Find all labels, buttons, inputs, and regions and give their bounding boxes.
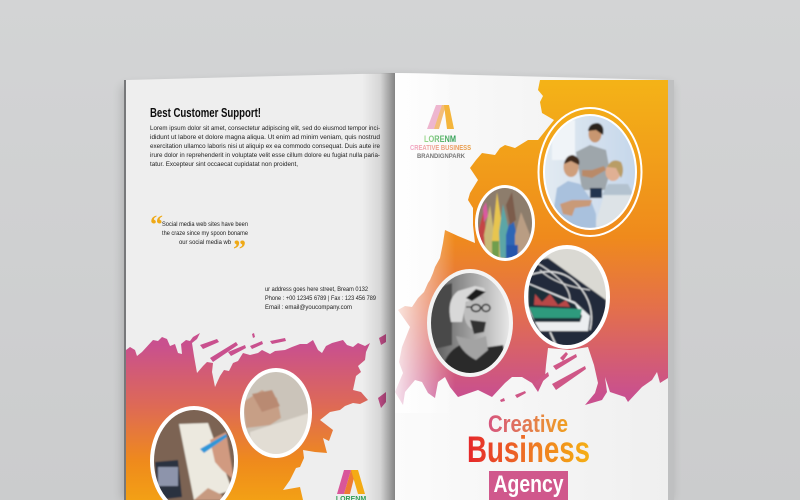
spine shadow	[362, 73, 395, 500]
pull quote	[150, 210, 248, 264]
body paragraph: exercitation ullamco laboris nisi ut aliquip ex ea commodo consequat. Duis aute ire	[150, 143, 380, 150]
body paragraph: tatur. Excepteur sint occaecat cupidatat non proident,	[150, 161, 298, 168]
left page colour splash	[126, 333, 370, 500]
body paragraph: ididunt ut labore et dolore magna aliqua. Ut enim ad minim veniam, quis nostrud	[150, 134, 380, 141]
splash flecks and streaks on left page	[200, 333, 386, 408]
body paragraph	[150, 125, 380, 168]
title: creative: Creative	[488, 411, 568, 438]
booklet drop shadow	[122, 76, 672, 500]
contact details: Email : email@youcompany.com	[265, 304, 352, 311]
left page logo	[336, 470, 366, 500]
title: business: Business	[467, 429, 590, 470]
pull quote: ”	[233, 235, 246, 264]
contact details: Phone : +00 12345 6789 | Fax : 123 456 789	[265, 295, 376, 302]
pink streaks in white brush area	[500, 352, 586, 402]
pull quote: Social media web sites have been	[162, 221, 248, 228]
contact details	[265, 286, 376, 311]
pull quote: the craze since my spoon boname	[162, 230, 248, 237]
body paragraph: irure dolor in reprehenderit in voluptate velit esse cillum dolore eu fugiat nulla paria-	[150, 152, 380, 159]
pull quote: our social media wb	[179, 239, 231, 246]
right page logo: CREATIVE BUSINESS	[410, 145, 471, 152]
photo: colored pencils	[475, 185, 535, 261]
brochure mockup scene	[116, 73, 678, 500]
photo: hands on keyboard	[240, 368, 312, 458]
right page logo: BRANDIGNPARK	[417, 153, 465, 160]
body paragraph: Lorem ipsum dolor sit amet, consectetur adipiscing elit, sed do eiusmod tempor inci-	[150, 125, 380, 132]
pull quote: “	[150, 210, 163, 239]
right page logo: LORENM	[424, 134, 456, 144]
right page colour splash	[395, 80, 668, 405]
right page logo	[410, 105, 471, 160]
contact details: ur address goes here street, Bream 0132	[265, 286, 368, 293]
photo: smartphone with earphones	[524, 245, 610, 350]
panel: right page	[395, 73, 668, 500]
panel: left page	[124, 73, 395, 500]
title: agency badge: Agency	[494, 471, 564, 498]
photo: man with hat and glasses	[427, 269, 513, 377]
photo: notebook and phone	[150, 406, 240, 500]
heading: best customer support: Best Customer Support!	[150, 106, 261, 120]
photo: office team	[538, 108, 642, 236]
right page edge shadow	[668, 80, 674, 500]
